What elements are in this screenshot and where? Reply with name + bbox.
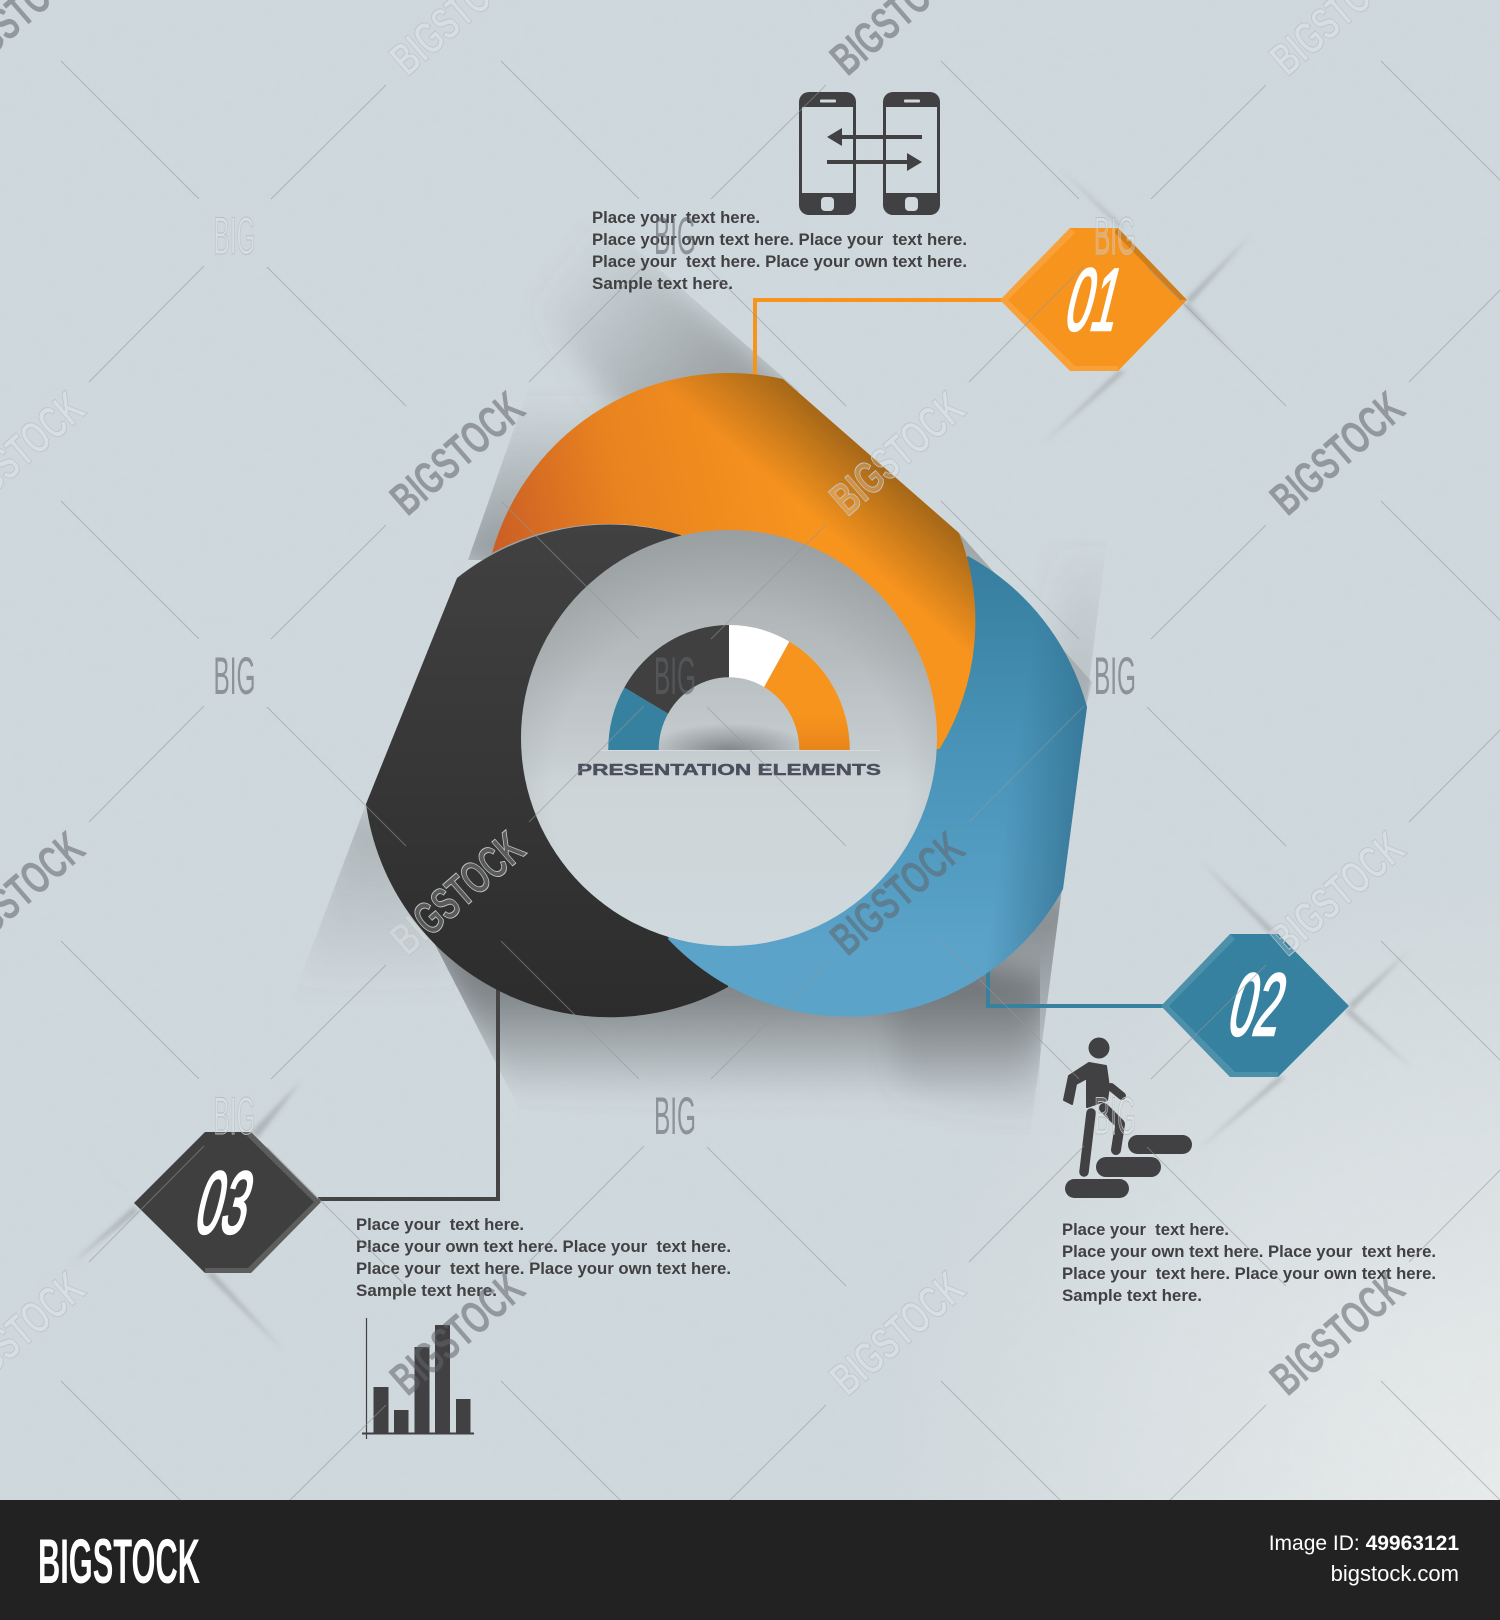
segment: dark [624, 625, 729, 714]
watermark BIG marks: BIG [214, 647, 256, 706]
icon: bar chart [362, 1318, 474, 1439]
badge 02 [1161, 934, 1349, 1077]
text block 1: Place your text here. [592, 208, 760, 227]
segment: orange [764, 642, 850, 750]
watermark BIGSTOCK marks: BIGSTOCK [820, 1261, 974, 1405]
ring segment: orange [492, 373, 975, 749]
number 03: 03 [187, 1155, 262, 1253]
watermark BIGSTOCK marks: BIGSTOCK [820, 821, 974, 965]
text block 3: Place your own text here. Place your text here. [356, 1237, 731, 1256]
half donut chart [608, 625, 850, 750]
text block 2 [1062, 1220, 1436, 1305]
text: BIG [1094, 1087, 1136, 1146]
watermark BIG marks: BIG [654, 647, 696, 706]
text block 1: Sample text here. [592, 274, 733, 293]
ring segment: blue [668, 556, 1087, 1017]
watermark BIGSTOCK marks: BIGSTOCK [1260, 821, 1414, 965]
watermark BIGSTOCK marks: BIGSTOCK [380, 381, 534, 525]
text block 1: Place your text here. Place your own text here. [592, 252, 967, 271]
shadow: lower right of blue segment [888, 891, 1062, 1102]
text block 2: Place your text here. [1062, 1220, 1229, 1239]
shadow: above orange segment [563, 254, 800, 408]
watermark BIGSTOCK marks: BIGSTOCK [1260, 381, 1414, 525]
connector line 01 [755, 300, 1002, 375]
shadow: left of black segment [314, 806, 436, 954]
limbs [1111, 1087, 1122, 1096]
donut inner shadow [659, 726, 799, 750]
text block 1: Place your own text here. Place your text here. [592, 230, 967, 249]
text block 3: Sample text here. [356, 1281, 497, 1300]
watermark BIGSTOCK marks: BIGSTOCK [380, 821, 534, 965]
shadow: right of blue segment [959, 533, 1099, 704]
number 01: 01 [1057, 252, 1132, 350]
shadow: below black and blue segments [434, 944, 1040, 1092]
inner circle [521, 530, 937, 946]
watermark BIG marks [214, 207, 1136, 1146]
ring segment: black [366, 525, 729, 1017]
watermark BIG marks: BIG [654, 1087, 696, 1146]
watermark BIG marks: BIG [654, 207, 696, 266]
text block 2: Sample text here. [1062, 1286, 1202, 1305]
text block 2: Place your text here. Place your own text here. [1062, 1264, 1436, 1283]
badge 01 [1000, 228, 1187, 371]
watermark BIGSTOCK marks: BIGSTOCK [380, 1261, 534, 1405]
head [1088, 1038, 1110, 1058]
watermark BIGSTOCK marks: BIGSTOCK [1260, 1261, 1414, 1405]
connector line 03 [318, 985, 498, 1199]
connector line 02 [988, 970, 1163, 1006]
segment: blue [608, 687, 668, 750]
text block 3 [356, 1215, 731, 1300]
watermark BIG marks: BIG [214, 207, 256, 266]
center title: PRESENTATION ELEMENTS [577, 762, 881, 779]
site name: bigstock.com [1331, 1561, 1459, 1586]
fold shadows behind the hexagons [70, 168, 1412, 1352]
icon: person climbing stairs [1064, 1038, 1192, 1198]
badge 03 [134, 1132, 321, 1273]
text block 3: Place your text here. [356, 1215, 524, 1234]
footer bar: BIGSTOCK [38, 1527, 200, 1597]
arrow right [827, 153, 922, 171]
text block 1 [592, 208, 967, 293]
arrow left [827, 128, 922, 146]
text: BIG [1094, 647, 1136, 706]
text: BIG [1094, 207, 1136, 266]
torso and left arm [1064, 1063, 1109, 1107]
chart baseline [600, 750, 880, 752]
icon: two phones exchanging data [799, 92, 940, 215]
phone left [799, 92, 856, 215]
text block 2: Place your own text here. Place your text here. [1062, 1242, 1436, 1261]
number 02: 02 [1220, 957, 1295, 1055]
text block 3: Place your text here. Place your own text here. [356, 1259, 731, 1278]
phone right [883, 92, 940, 215]
steps [1128, 1135, 1192, 1154]
shadow: left of orange segment [468, 420, 626, 560]
footer bar [0, 1500, 1500, 1620]
watermark BIG marks: BIG [214, 1087, 256, 1146]
segment: white [729, 625, 789, 687]
watermark BIGSTOCK marks: BIGSTOCK [820, 381, 974, 525]
image id: Image ID: 49963121 [1269, 1532, 1459, 1555]
